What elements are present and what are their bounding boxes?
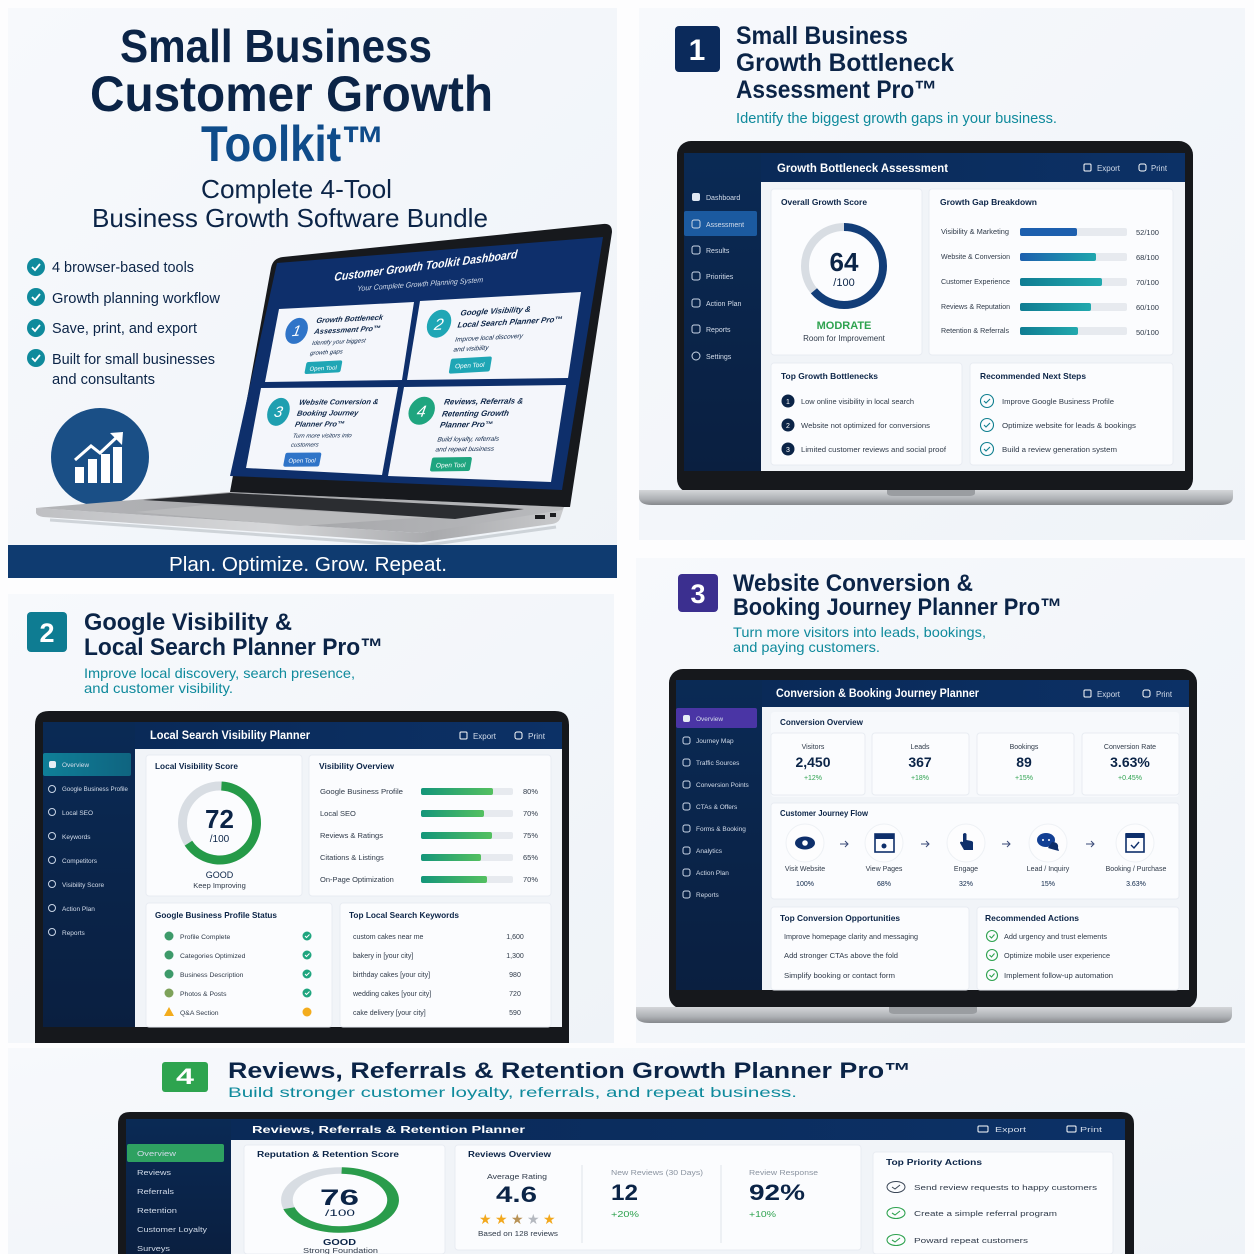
sidebar 1: Assessment xyxy=(706,222,744,229)
priority actions: Create a simple referral program xyxy=(914,1209,1057,1218)
icon: growth chart xyxy=(51,408,149,506)
sidebar 2: Action Plan xyxy=(62,906,95,913)
visibility score: Local Visibility Score xyxy=(155,761,238,771)
tool card 3: customers xyxy=(290,443,319,449)
step: engage: 32% xyxy=(959,881,973,888)
profile status: Categories Optimized xyxy=(180,953,246,960)
reviews overview: +20% xyxy=(611,1210,639,1219)
score card: Overall Growth Score xyxy=(781,197,867,207)
score card: 64 xyxy=(830,247,859,277)
header 3: Export xyxy=(1097,690,1121,699)
sidebar 3: Action Plan xyxy=(696,870,729,877)
heading 3 xyxy=(733,570,1062,621)
banner xyxy=(8,545,617,578)
sidebar 3: Reports xyxy=(696,892,720,899)
bar chart: visibility: 80% xyxy=(523,787,538,796)
bottlenecks list xyxy=(771,363,962,465)
sidebar 4: Overview xyxy=(137,1149,177,1158)
sidebar 2: Local SEO xyxy=(62,810,93,817)
bar chart: growth gap: 52/100 xyxy=(1136,228,1159,237)
header 2: Local Search Visibility Planner xyxy=(150,730,310,742)
sidebar 3: Forms & Booking xyxy=(696,826,746,833)
conversion overview: Leads xyxy=(910,744,930,751)
retention score: GOOD xyxy=(323,1238,356,1247)
subtitle: Complete 4-Tool xyxy=(201,174,392,204)
sidebar 1 xyxy=(684,153,761,471)
tool card 3: Turn more visitors into xyxy=(292,433,353,440)
conversion overview: Visitors xyxy=(802,744,825,751)
visibility score: 72 xyxy=(205,804,234,834)
sidebar 2: Keywords xyxy=(62,834,91,841)
bar chart: growth gap: Visibility & Marketing xyxy=(941,229,1009,236)
bar chart: visibility: 65% xyxy=(523,853,538,862)
heading 3: Website Conversion & xyxy=(733,570,973,597)
sidebar 3: Traffic Sources xyxy=(696,760,740,767)
conversion overview: Conversion Overview xyxy=(780,717,863,727)
step: booking xyxy=(1106,824,1166,888)
conversion overview: Bookings xyxy=(1010,744,1039,751)
tool card 2: Google Visibility & xyxy=(460,305,532,318)
conversion opportunities: Simplify booking or contact form xyxy=(784,973,895,980)
badge 2: 2 xyxy=(39,618,55,648)
priority actions: Top Priority Actions xyxy=(886,1158,983,1167)
next steps list xyxy=(970,363,1173,465)
laptop 4 xyxy=(118,1112,1134,1254)
step: booking: Booking / Purchase xyxy=(1106,866,1166,873)
bar chart: visibility: 75% xyxy=(523,831,538,840)
sidebar 3: CTAs & Offers xyxy=(696,804,738,811)
step: view pages: 68% xyxy=(877,881,891,888)
profile status: Q&A Section xyxy=(180,1010,219,1017)
dashboard screen xyxy=(230,237,603,490)
star rating xyxy=(479,1211,556,1227)
step: engage: Engage xyxy=(954,866,978,873)
sidebar 1: Action Plan xyxy=(706,301,742,308)
laptop deck xyxy=(36,492,564,533)
star rating: ★ xyxy=(527,1211,540,1227)
tool card 1: Open Tool xyxy=(309,366,337,373)
laptop: toolkit dashboard xyxy=(36,224,612,546)
subtitle: Business Growth Software Bundle xyxy=(92,203,488,233)
panel: toolkit cover xyxy=(8,8,617,578)
score card xyxy=(771,189,922,355)
badge 3: 3 xyxy=(690,579,706,609)
heading 1: Small Business xyxy=(736,22,908,50)
reviews overview: 4.6 xyxy=(496,1182,537,1207)
step: lead inquiry: 15% xyxy=(1041,881,1055,888)
tagline 2: Improve local discovery, search presence, xyxy=(84,665,355,681)
priority actions: Send review requests to happy customers xyxy=(914,1183,1097,1192)
recommended actions: Optimize mobile user experience xyxy=(1004,953,1110,960)
sidebar 4: Referrals xyxy=(137,1187,174,1196)
sidebar 3 xyxy=(676,680,762,990)
reviews overview: Average Rating xyxy=(487,1172,547,1181)
keywords table: Top Local Search Keywords xyxy=(349,910,459,920)
sidebar 1: Dashboard xyxy=(706,195,740,202)
sidebar 3: Analytics xyxy=(696,848,723,855)
badge 3 xyxy=(678,574,718,612)
keywords table: 720 xyxy=(509,991,521,998)
feature list: 4 browser-based tools xyxy=(52,259,194,276)
visibility score: /100 xyxy=(210,834,230,845)
conversion opportunities: Top Conversion Opportunities xyxy=(780,913,900,923)
bar chart: growth gap: Customer Experience xyxy=(941,279,1010,286)
tagline 3: Turn more visitors into leads, bookings, xyxy=(733,624,986,640)
arrow xyxy=(921,841,929,847)
bottlenecks list: Limited customer reviews and social proof xyxy=(801,445,947,454)
panel: tool 2 xyxy=(8,594,614,1043)
profile status xyxy=(146,903,332,1027)
tool card 3: Website Conversion & xyxy=(298,397,379,407)
sidebar 2 xyxy=(43,722,135,1027)
bar chart: visibility: Visibility Overview xyxy=(319,761,394,771)
conversion overview: 89 xyxy=(1016,754,1032,770)
visibility score: GOOD xyxy=(206,870,234,880)
header 3: Conversion & Booking Journey Planner xyxy=(776,688,979,700)
tool card 3: 3 xyxy=(273,404,285,421)
bar chart: growth gap: Reviews & Reputation xyxy=(941,304,1010,311)
tool card 3 xyxy=(246,387,398,475)
reviews overview: Reviews Overview xyxy=(468,1150,552,1159)
header 3 xyxy=(762,680,1189,707)
tool card 1: Growth Bottleneck xyxy=(316,313,385,325)
tagline 2 xyxy=(84,665,355,696)
feature list: and consultants xyxy=(52,371,155,388)
header 2: Print xyxy=(528,732,546,741)
reviews overview: Based on 128 reviews xyxy=(478,1231,559,1238)
badge 4 xyxy=(162,1062,208,1092)
sidebar 1: Priorities xyxy=(706,274,734,281)
heading 1 xyxy=(736,22,954,104)
laptop front lip xyxy=(36,507,564,542)
reviews overview: Review Response xyxy=(749,1170,818,1177)
sidebar 3: Journey Map xyxy=(696,738,734,745)
laptop 1 xyxy=(639,141,1233,505)
sidebar 2: Competitors xyxy=(62,858,98,865)
bar chart: visibility xyxy=(309,755,551,896)
tool card 4: Retenting Growth xyxy=(441,409,510,418)
score card: Room for Improvement xyxy=(803,334,886,343)
next steps list: Optimize website for leads & bookings xyxy=(1002,421,1136,430)
star rating: ★ xyxy=(511,1211,524,1227)
dashboard subheading: Your Complete Growth Planning System xyxy=(357,275,484,293)
bar chart: visibility: 70% xyxy=(523,875,538,884)
step: visit website: 100% xyxy=(796,881,814,888)
tagline 4: Build stronger customer loyalty, referrals, and repeat business. xyxy=(228,1084,797,1100)
panel: tool 3 xyxy=(636,558,1245,1043)
keywords table: birthday cakes [your city] xyxy=(353,972,430,979)
tool card 4: Open Tool xyxy=(435,462,467,469)
tagline 2: and customer visibility. xyxy=(84,680,233,696)
tool card 1: 1 xyxy=(291,323,302,340)
bar chart: visibility: Google Business Profile xyxy=(320,787,403,796)
tool card 2: Improve local discovery xyxy=(455,333,524,344)
conversion overview: 3.63% xyxy=(1110,754,1150,770)
keywords table: 980 xyxy=(509,972,521,979)
sidebar 1: Settings xyxy=(706,354,732,361)
recommended actions: Implement follow-up automation xyxy=(1004,973,1113,980)
header 1: Export xyxy=(1097,164,1121,173)
reviews overview xyxy=(455,1145,861,1250)
tool card 2: Open Tool xyxy=(454,362,486,370)
conversion overview: 367 xyxy=(908,754,932,770)
tool card 4: Reviews, Referrals & xyxy=(443,397,524,406)
retention score xyxy=(244,1145,445,1254)
header 4: Print xyxy=(1080,1125,1103,1134)
tool card 2 xyxy=(407,292,581,380)
sidebar 4: Customer Loyalty xyxy=(137,1225,207,1234)
laptop 3 xyxy=(636,669,1232,1023)
header 2 xyxy=(135,722,562,749)
visibility score: Keep Improving xyxy=(193,881,246,890)
sidebar 4: Surveys xyxy=(137,1244,170,1253)
arrow xyxy=(1002,841,1010,847)
sidebar 2: Visibility Score xyxy=(62,882,105,889)
bar chart: growth gap: Website & Conversion xyxy=(941,254,1010,261)
header 4: Export xyxy=(995,1125,1027,1134)
recommended actions xyxy=(977,907,1179,990)
bar chart: growth gap: 70/100 xyxy=(1136,278,1159,287)
step: view pages xyxy=(865,824,903,888)
sidebar 3: Conversion Points xyxy=(696,782,749,789)
next steps list: Improve Google Business Profile xyxy=(1002,397,1114,406)
laptop shadow xyxy=(50,520,556,546)
heading 2: Google Visibility & xyxy=(84,609,292,636)
panel: tool 4 xyxy=(8,1048,1245,1254)
tool card 4: 4 xyxy=(415,403,428,421)
sidebar 2: Overview xyxy=(62,762,89,769)
bottlenecks list: Website not optimized for conversions xyxy=(801,421,930,430)
recommended actions: Recommended Actions xyxy=(985,913,1079,923)
star rating: ★ xyxy=(479,1211,492,1227)
tool card 3: Open Tool xyxy=(288,459,316,465)
tool card 2: 2 xyxy=(432,316,445,334)
retention score: 76 xyxy=(320,1185,359,1210)
conversion opportunities: Improve homepage clarity and messaging xyxy=(784,934,918,941)
title xyxy=(90,20,493,172)
keyboard xyxy=(143,493,524,519)
heading 1: Assessment Pro™ xyxy=(736,76,937,104)
conversion overview: Conversion Rate xyxy=(1104,744,1156,751)
header 3: Print xyxy=(1156,690,1173,699)
bar chart: visibility: Local SEO xyxy=(320,809,356,818)
tool card 4: and repeat business xyxy=(435,446,495,453)
conversion overview: +12% xyxy=(804,775,822,782)
badge 1: 1 xyxy=(689,34,705,67)
heading 3: Booking Journey Planner Pro™ xyxy=(733,594,1062,621)
bar chart: visibility: Citations & Listings xyxy=(320,853,384,862)
priority actions: Poward repeat customers xyxy=(914,1236,1028,1245)
bar chart: growth gap: Growth Gap Breakdown xyxy=(940,197,1037,207)
sidebar 4 xyxy=(126,1119,231,1254)
arrow xyxy=(840,841,848,847)
visibility score xyxy=(146,755,302,896)
bottlenecks list: 1 xyxy=(786,399,790,406)
sidebar 4: Retention xyxy=(137,1206,177,1215)
conversion overview: +18% xyxy=(911,775,929,782)
tool card 1 xyxy=(265,302,414,382)
step: booking: 3.63% xyxy=(1126,881,1146,888)
star rating: ★ xyxy=(543,1211,556,1227)
keywords table: 590 xyxy=(509,1010,521,1017)
tool card 1: growth gaps xyxy=(310,349,343,357)
conversion overview: +15% xyxy=(1015,775,1033,782)
bar chart: growth gap xyxy=(929,189,1173,355)
keywords table xyxy=(340,903,551,1027)
journey flow: Customer Journey Flow xyxy=(780,808,868,818)
next steps list: Recommended Next Steps xyxy=(980,371,1086,381)
feature list: Save, print, and export xyxy=(52,320,198,337)
badge 2 xyxy=(27,612,67,652)
journey flow xyxy=(771,803,1179,899)
header 1 xyxy=(761,153,1185,182)
step: visit website xyxy=(785,824,825,888)
bottlenecks list: 2 xyxy=(786,423,790,430)
conversion overview xyxy=(771,712,1179,797)
heading 2 xyxy=(84,609,383,661)
feature list: Built for small businesses xyxy=(52,351,215,368)
keywords table: 1,300 xyxy=(506,953,524,960)
retention score: /100 xyxy=(325,1208,355,1219)
conversion opportunities xyxy=(771,907,969,990)
banner: Plan. Optimize. Grow. Repeat. xyxy=(169,554,447,576)
step: lead inquiry: Lead / Inquiry xyxy=(1027,866,1070,873)
reviews overview: 92% xyxy=(749,1180,805,1205)
header 4: Reviews, Referrals & Retention Planner xyxy=(252,1124,525,1136)
tool card 3: Booking Journey xyxy=(296,408,360,418)
reviews overview: New Reviews (30 Days) xyxy=(611,1170,703,1177)
score card: MODRATE xyxy=(817,320,871,332)
header 2: Export xyxy=(473,732,497,741)
keywords table: cake delivery [your city] xyxy=(353,1010,426,1017)
bar chart: visibility: Reviews & Ratings xyxy=(320,831,383,840)
sidebar 2: Google Business Profile xyxy=(62,786,129,793)
conversion opportunities: Add stronger CTAs above the fold xyxy=(784,953,898,960)
star rating: ★ xyxy=(495,1211,508,1227)
dashboard heading: Customer Growth Toolkit Dashboard xyxy=(334,247,519,284)
profile status: Google Business Profile Status xyxy=(155,910,277,920)
recommended actions: Add urgency and trust elements xyxy=(1004,934,1108,941)
header 1: Growth Bottleneck Assessment xyxy=(777,163,948,175)
bar chart: growth gap: Retention & Referrals xyxy=(941,328,1010,335)
arrow xyxy=(1086,841,1094,847)
badge 1 xyxy=(675,26,720,72)
tool card 4 xyxy=(388,385,566,482)
tool card 2: Local Search Planner Pro™ xyxy=(457,315,563,330)
reviews overview: +10% xyxy=(749,1210,776,1219)
title: Customer Growth xyxy=(90,66,493,122)
panel: tool 1 xyxy=(639,8,1245,540)
sidebar 2: Reports xyxy=(62,930,86,937)
sidebar 1: Results xyxy=(706,248,730,255)
bar chart: visibility: 70% xyxy=(523,809,538,818)
trackpad xyxy=(135,505,430,526)
header 4 xyxy=(231,1119,1125,1140)
sidebar 1: Reports xyxy=(706,327,731,334)
tool card 4: Planner Pro™ xyxy=(439,420,494,429)
sidebar 4: Reviews xyxy=(137,1168,171,1177)
tool card 3: Planner Pro™ xyxy=(294,419,345,429)
laptop 2 xyxy=(35,711,569,1043)
bar chart: growth gap: 68/100 xyxy=(1136,253,1159,262)
step: view pages: View Pages xyxy=(866,866,903,873)
conversion overview: 2,450 xyxy=(795,754,831,770)
step: engage xyxy=(947,824,985,888)
bar chart: growth gap: 60/100 xyxy=(1136,303,1159,312)
tagline 3: and paying customers. xyxy=(733,639,880,655)
keywords table: bakery in [your city] xyxy=(353,953,413,960)
laptop bezel xyxy=(230,224,612,507)
title: Small Business xyxy=(120,20,432,72)
keywords table: wedding cakes [your city] xyxy=(352,991,431,998)
reviews overview: 12 xyxy=(611,1180,638,1205)
priority actions xyxy=(873,1152,1113,1254)
heading 2: Local Search Planner Pro™ xyxy=(84,634,383,661)
feature list: Growth planning workflow xyxy=(52,290,220,307)
sidebar 3: Overview xyxy=(696,716,723,723)
retention score: Reputation & Retention Score xyxy=(257,1150,400,1159)
heading 4: Reviews, Referrals & Retention Growth Planner Pro™ xyxy=(228,1058,911,1083)
profile status: Profile Complete xyxy=(180,934,230,941)
tool card 1: Identify your biggest xyxy=(311,338,366,347)
conversion overview: +0.45% xyxy=(1118,775,1142,782)
keywords table: custom cakes near me xyxy=(353,934,424,941)
tool card 2: and visibility xyxy=(453,345,490,354)
step: visit website: Visit Website xyxy=(785,866,825,873)
bottlenecks list: Low online visibility in local search xyxy=(801,397,914,406)
bottlenecks list: Top Growth Bottlenecks xyxy=(781,371,878,381)
header 1: Print xyxy=(1151,164,1168,173)
tagline 3 xyxy=(733,624,986,655)
score card: /100 xyxy=(833,277,855,289)
bottlenecks list: 3 xyxy=(786,447,790,454)
profile status: Photos & Posts xyxy=(180,991,227,998)
tool card 1: Assessment Pro™ xyxy=(313,324,381,336)
profile status: Business Description xyxy=(180,972,244,979)
title: Toolkit™ xyxy=(201,116,385,172)
bar chart: visibility: On-Page Optimization xyxy=(320,875,394,884)
tagline 1: Identify the biggest growth gaps in your business. xyxy=(736,111,1057,127)
heading 1: Growth Bottleneck xyxy=(736,49,954,77)
next steps list: Build a review generation system xyxy=(1002,445,1117,454)
usb ports xyxy=(535,513,556,519)
tool card 4: Build loyalty, referrals xyxy=(437,436,500,443)
keywords table: 1,600 xyxy=(506,934,524,941)
feature list xyxy=(27,258,220,388)
bar chart: growth gap: 50/100 xyxy=(1136,328,1159,337)
subtitle xyxy=(92,174,488,233)
step: lead inquiry xyxy=(1027,824,1070,888)
badge 4: 4 xyxy=(176,1064,195,1089)
